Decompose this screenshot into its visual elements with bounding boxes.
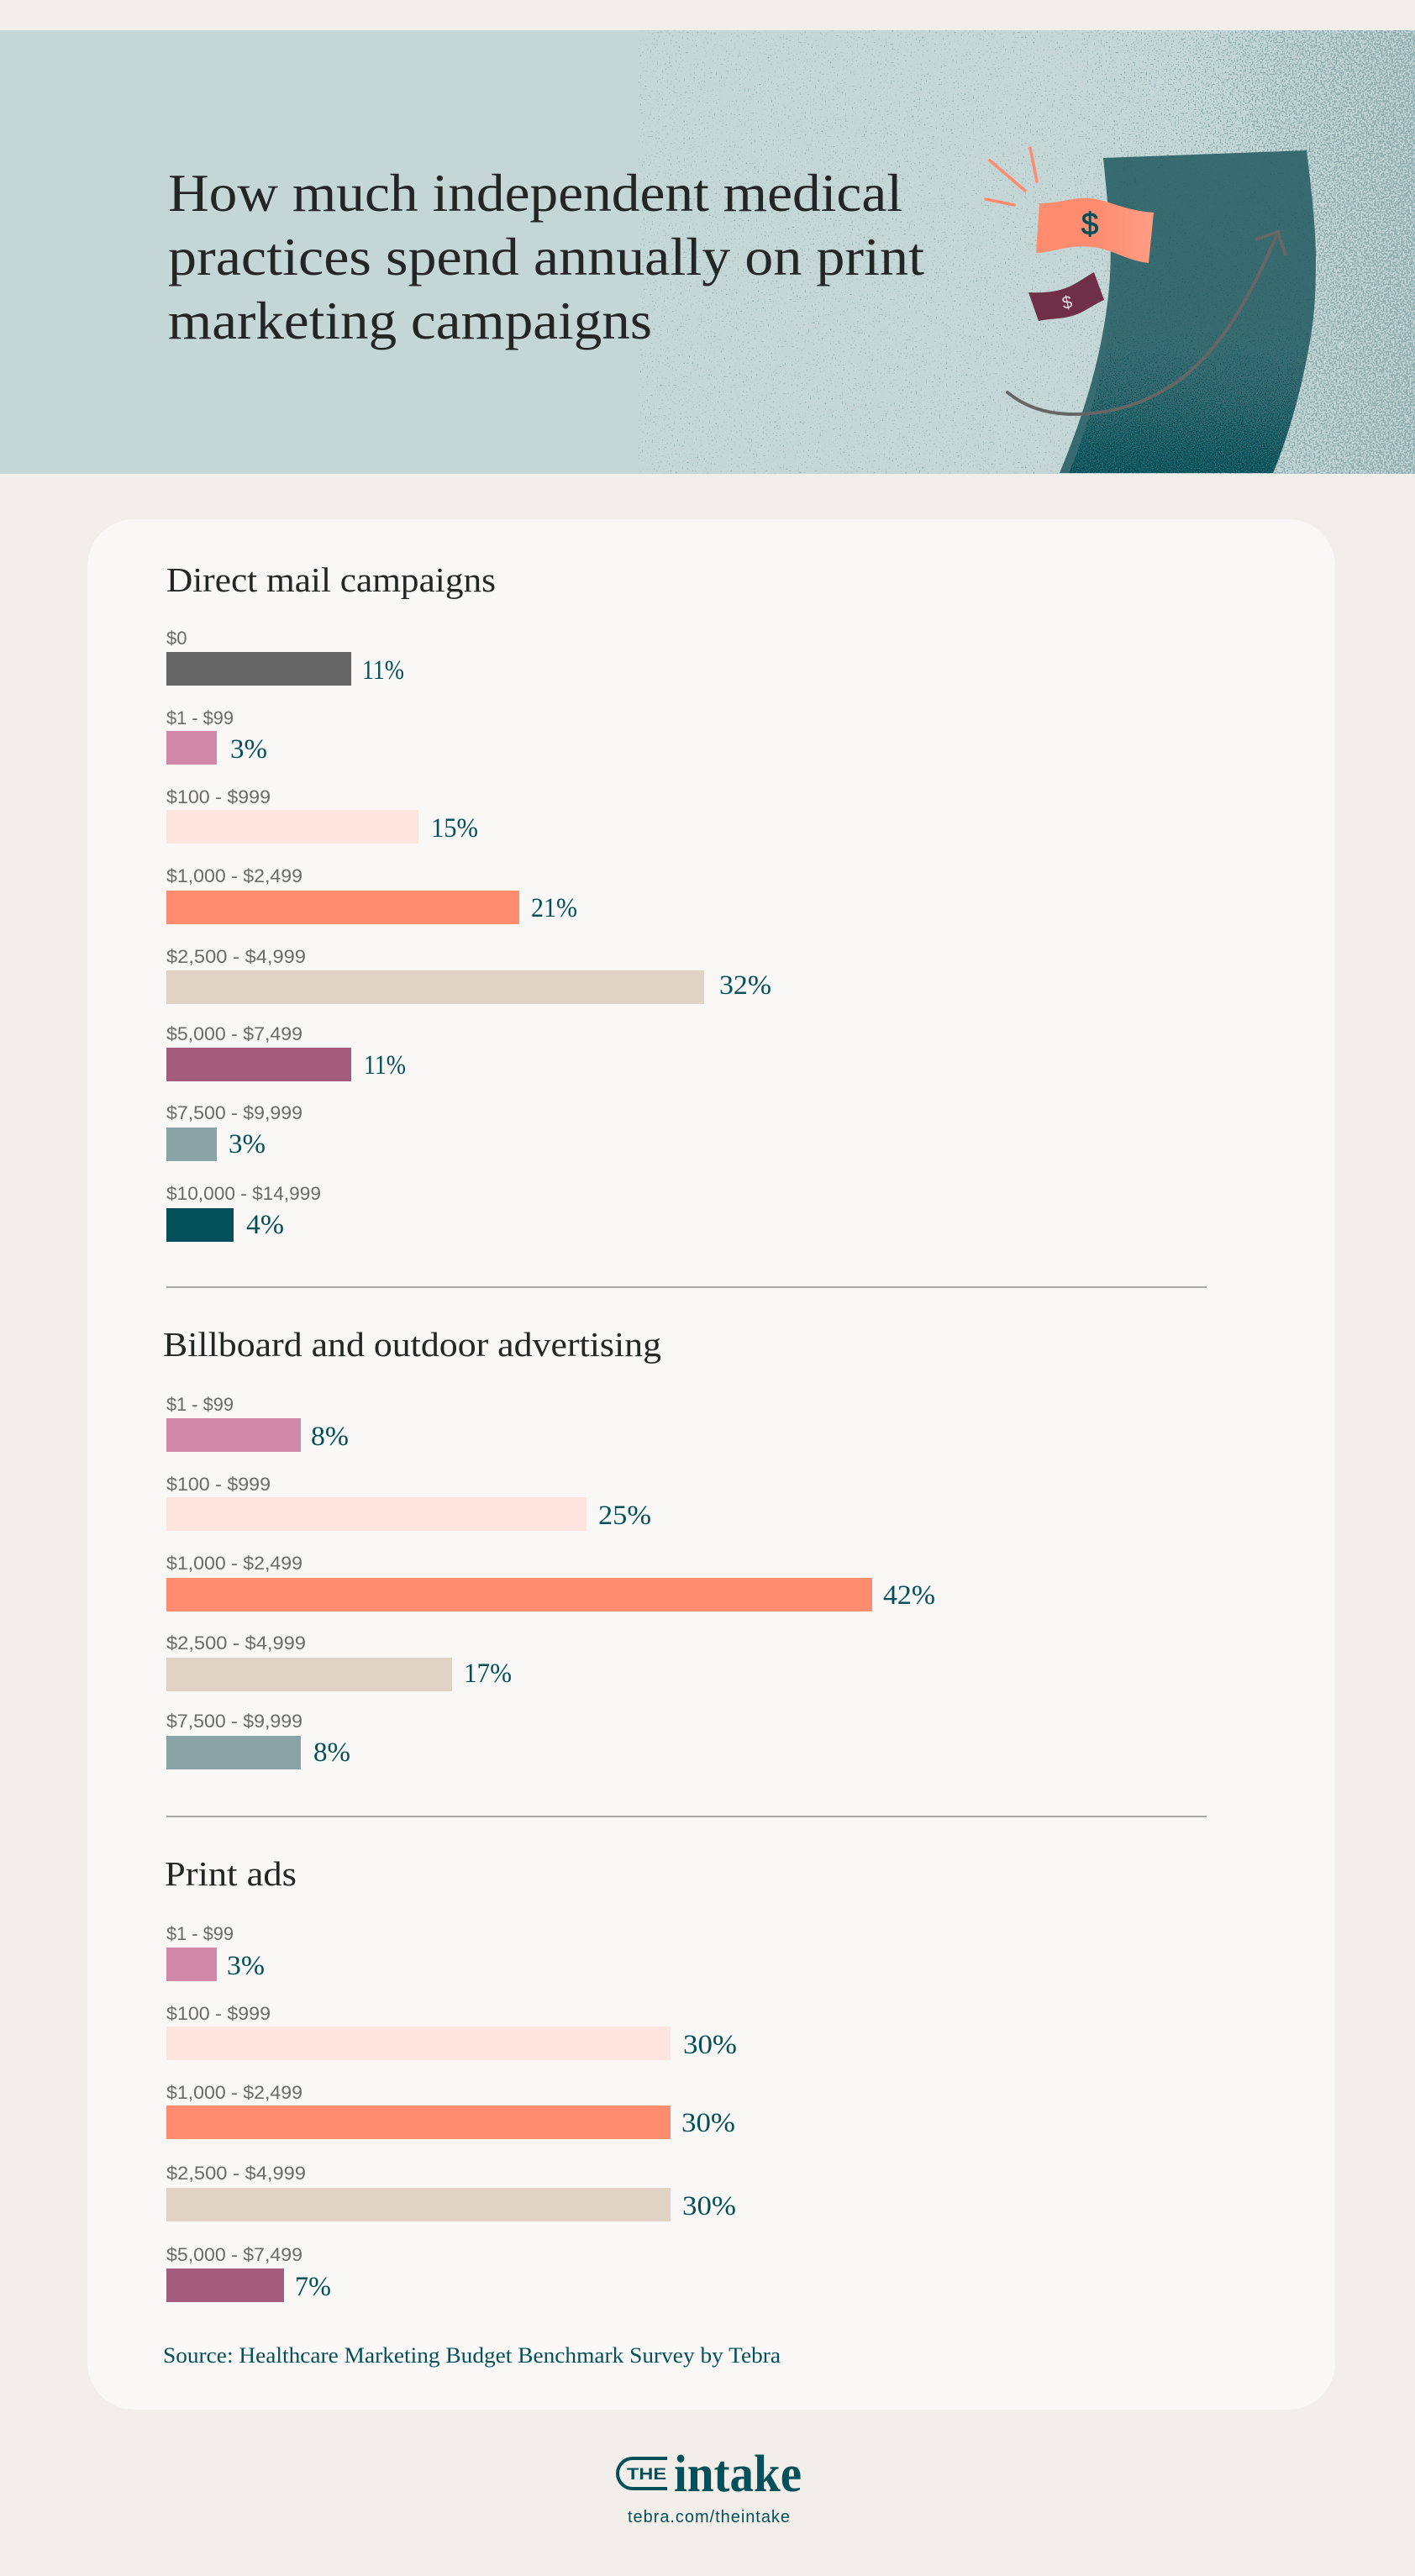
row: $2,500 - $4,999: $2,500 - $4,999 xyxy=(166,1632,306,1653)
row: $2,500 - $4,999: $2,500 - $4,999 xyxy=(166,946,306,967)
row: $7,500 - $9,999 xyxy=(166,1711,350,1769)
row: $100 - $999: 15% xyxy=(431,813,478,844)
illustration: rising curved band with money and arrow xyxy=(986,148,1320,473)
row: $100 - $999: $100 - $999 xyxy=(166,2003,271,2024)
row: $1,000 - $2,499 xyxy=(166,1553,935,1611)
section: billboard and outdoor advertising xyxy=(163,1325,935,1769)
row: $1 - $99: 3% xyxy=(227,1951,265,1981)
row: $7,500 - $9,999: 8% xyxy=(313,1737,350,1768)
row: $1,000 - $2,499: $1,000 - $2,499 xyxy=(166,1553,302,1574)
row: $100 - $999 xyxy=(166,2003,737,2060)
row: $10,000 - $14,999: $10,000 - $14,999 xyxy=(166,1183,321,1204)
row: $2,500 - $4,999: 17% xyxy=(464,1659,512,1689)
title: How much independent medical xyxy=(168,164,902,223)
heading: print ads: Print ads xyxy=(165,1854,297,1893)
row: $2,500 - $4,999: 30% xyxy=(682,2191,736,2221)
row: $1,000 - $2,499 xyxy=(166,865,577,924)
row: $7,500 - $9,999 xyxy=(166,1102,302,1161)
title: practices spend annually on print xyxy=(168,228,925,287)
row: $2,500 - $4,999: 32% xyxy=(719,970,771,1001)
row: $1 - $99 xyxy=(166,1923,265,1981)
row: $5,000 - $7,499 xyxy=(166,1023,406,1081)
row: $1,000 - $2,499: $1,000 - $2,499 xyxy=(166,865,302,886)
title xyxy=(168,164,925,350)
row: $1,000 - $2,499 xyxy=(166,2082,735,2139)
section: print ads xyxy=(165,1854,737,2302)
url: tebra.com/theintake xyxy=(628,2508,790,2526)
row: $2,500 - $4,999: $2,500 - $4,999 xyxy=(166,2163,306,2184)
row: $1,000 - $2,499: 21% xyxy=(531,893,577,923)
main card xyxy=(87,519,1335,2410)
row: $1,000 - $2,499: 42% xyxy=(883,1580,935,1611)
row: $5,000 - $7,499: 11% xyxy=(364,1050,406,1080)
heading: billboard: Billboard and outdoor advertising xyxy=(163,1325,661,1364)
row: $1 - $99: 3% xyxy=(230,734,267,765)
row: $1 - $99 xyxy=(166,1394,349,1452)
row: $1 - $99: $1 - $99 xyxy=(166,707,234,728)
row: $7,500 - $9,999: $7,500 - $9,999 xyxy=(166,1102,302,1123)
row: $100 - $999: $100 - $999 xyxy=(166,1474,271,1495)
row: $100 - $999 xyxy=(166,786,478,844)
row: $0: $0 xyxy=(166,628,187,649)
row: $0 xyxy=(166,628,404,686)
row: $10,000 - $14,999: 4% xyxy=(246,1210,284,1240)
row: $1 - $99 xyxy=(166,707,267,765)
row: $1 - $99: $1 - $99 xyxy=(166,1394,234,1415)
row: $5,000 - $7,499: $5,000 - $7,499 xyxy=(166,2244,302,2265)
row: $1 - $99: $1 - $99 xyxy=(166,1923,234,1944)
illustration: rising curved band with money and arrow: $ xyxy=(1060,292,1075,313)
row: $10,000 - $14,999 xyxy=(166,1183,321,1242)
row: $2,500 - $4,999 xyxy=(166,946,771,1004)
logo: The Intake: THE xyxy=(627,2466,666,2484)
title: marketing campaigns xyxy=(168,292,652,350)
row: $7,500 - $9,999: 3% xyxy=(229,1129,266,1159)
source note: Source: Healthcare Marketing Budget Benchmark Survey by Tebra xyxy=(163,2343,781,2368)
row: $5,000 - $7,499 xyxy=(166,2244,331,2302)
illustration: rising curved band with money and arrow: $ xyxy=(1081,207,1098,241)
row: $100 - $999 xyxy=(166,1474,651,1531)
row: $5,000 - $7,499: $5,000 - $7,499 xyxy=(166,1023,302,1044)
logo: The Intake: intake xyxy=(674,2446,802,2503)
row: $2,500 - $4,999 xyxy=(166,2163,736,2221)
row: $1,000 - $2,499: $1,000 - $2,499 xyxy=(166,2082,302,2103)
row: $5,000 - $7,499: 7% xyxy=(295,2272,331,2302)
row: $1 - $99: 8% xyxy=(311,1422,349,1452)
row: $7,500 - $9,999: $7,500 - $9,999 xyxy=(166,1711,302,1732)
logo: The Intake xyxy=(618,2446,802,2503)
row: $2,500 - $4,999 xyxy=(166,1632,512,1691)
heading: direct mail: Direct mail campaigns xyxy=(166,560,496,599)
row: $100 - $999: $100 - $999 xyxy=(166,786,271,807)
row: $100 - $999: 25% xyxy=(598,1501,651,1531)
header banner xyxy=(0,30,1415,474)
section: direct mail campaigns xyxy=(166,560,771,1242)
row: $0: 11% xyxy=(362,655,404,686)
row: $100 - $999: 30% xyxy=(683,2030,737,2060)
row: $1,000 - $2,499: 30% xyxy=(681,2108,735,2138)
